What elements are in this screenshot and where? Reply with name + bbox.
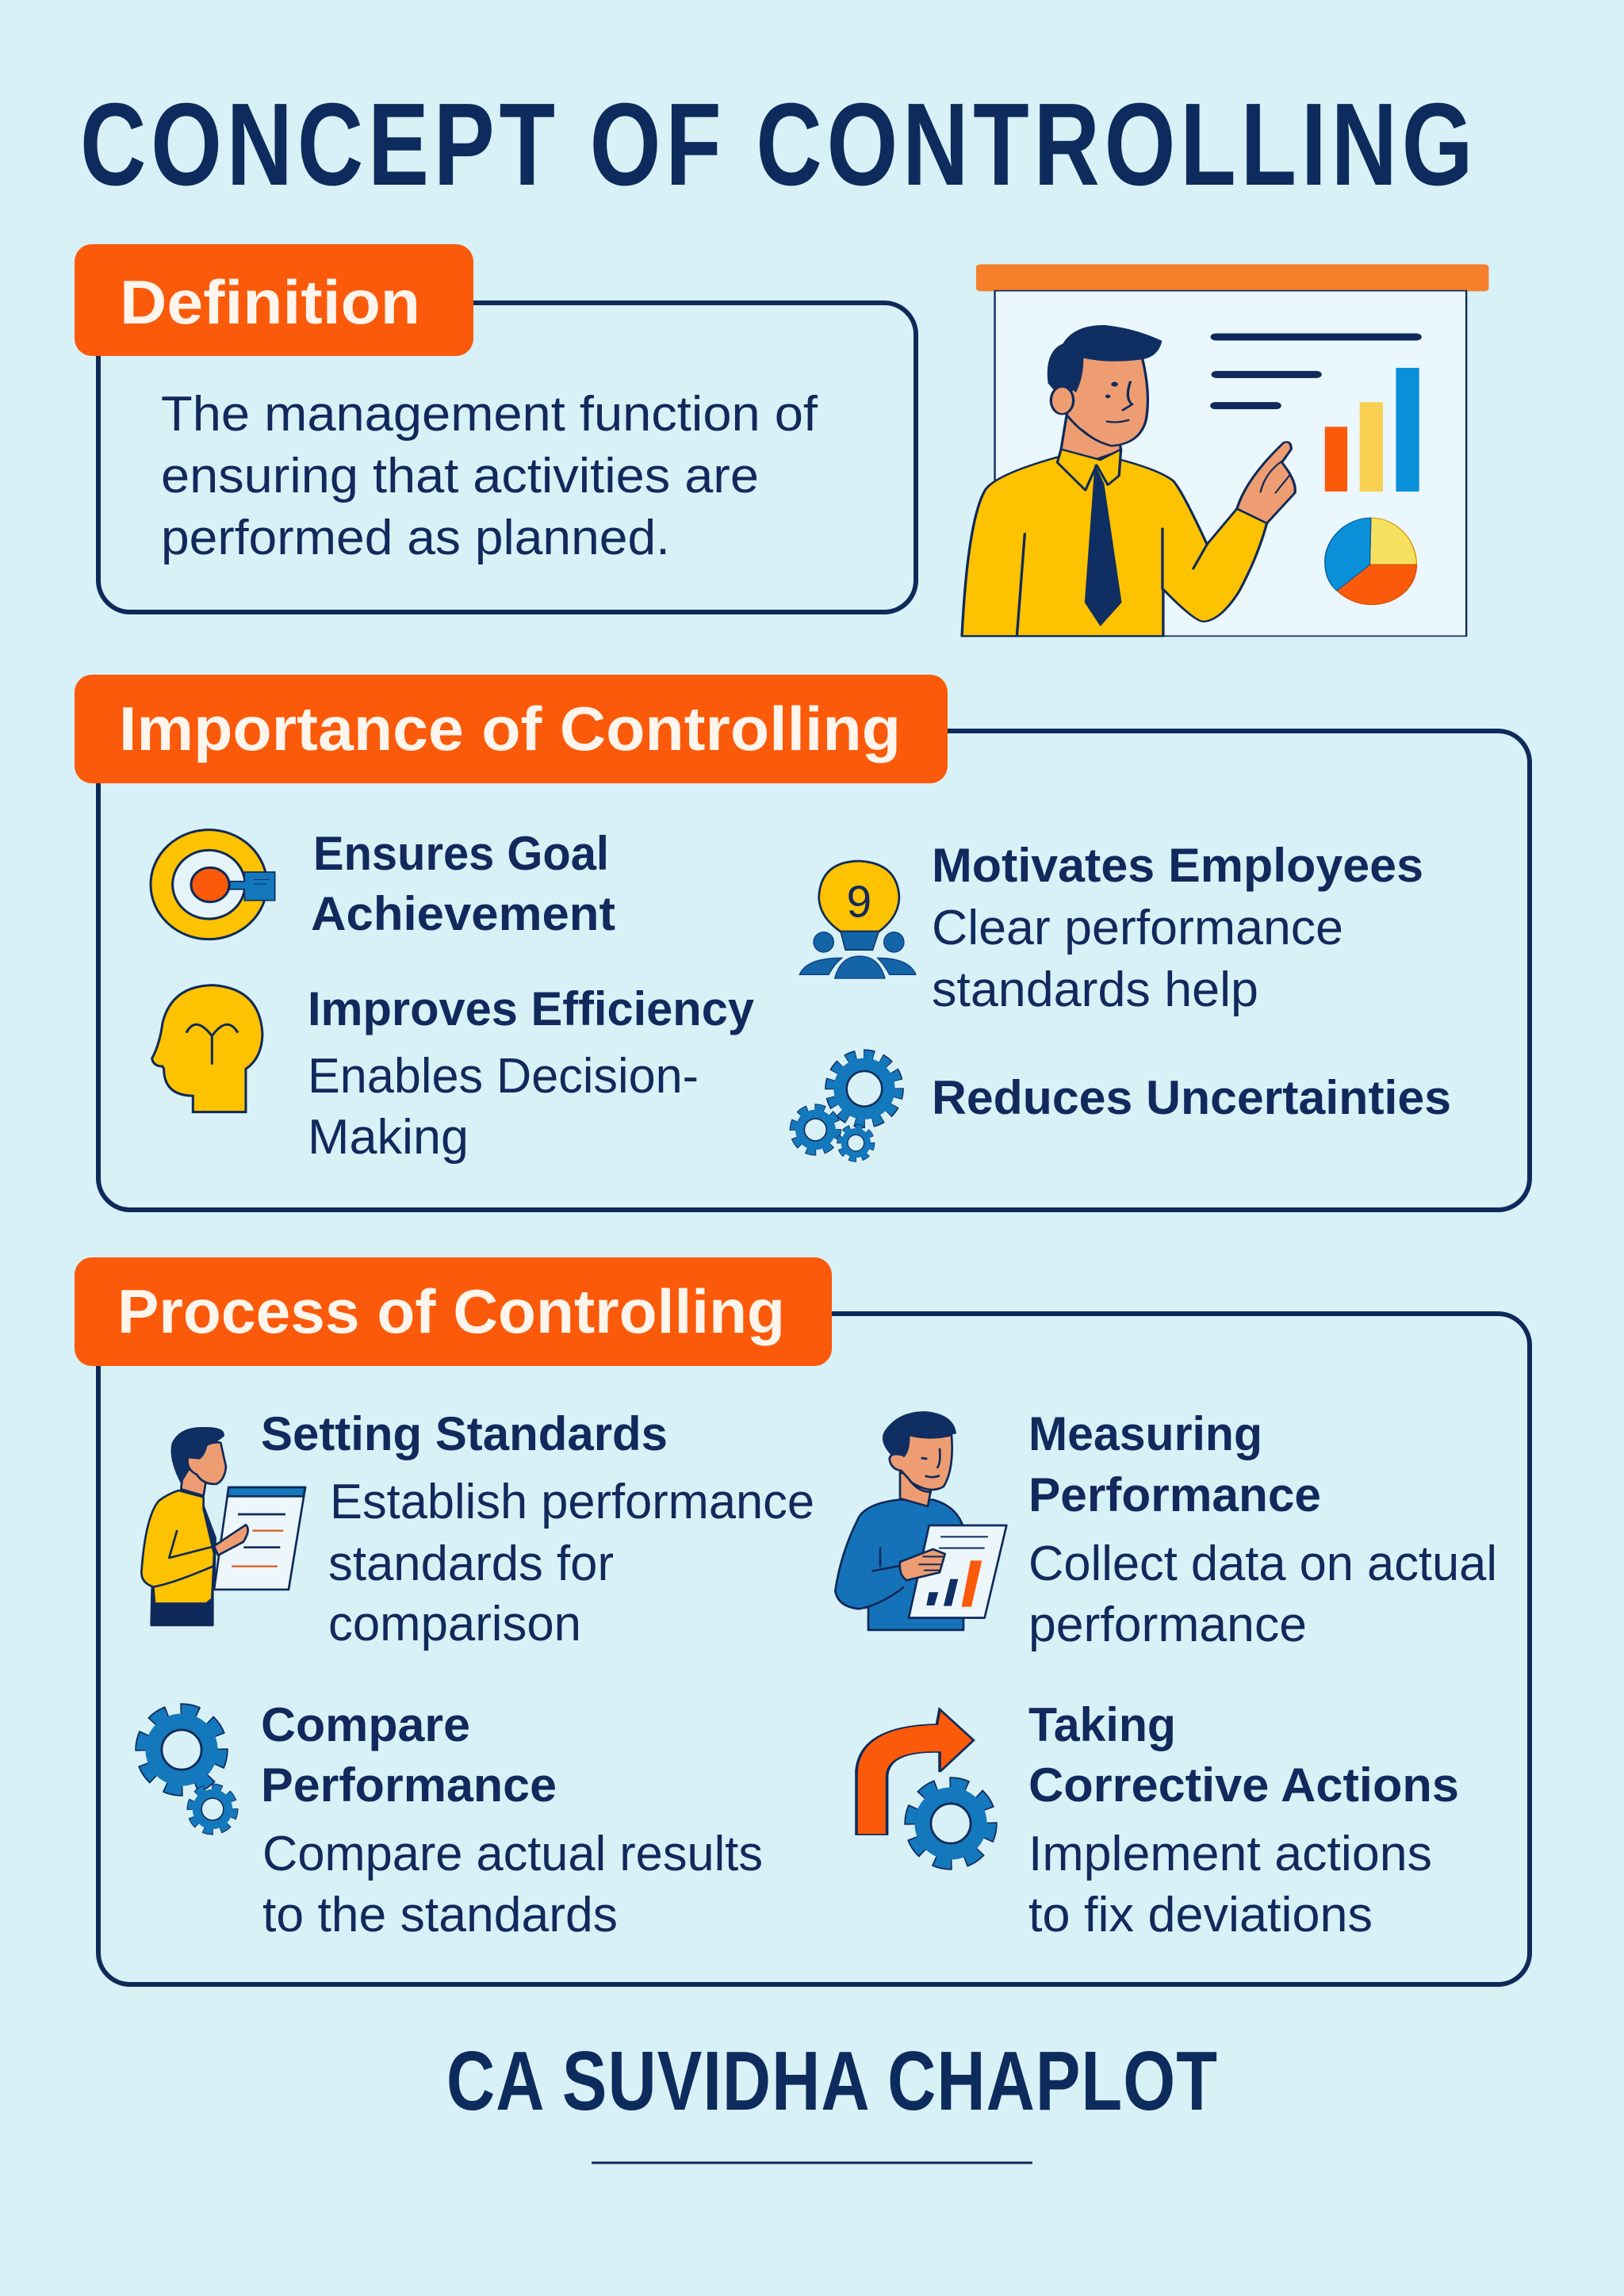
footer: author name: CA SUVIDHA CHAPLOT	[446, 2034, 1217, 2128]
item: setting standards	[261, 1407, 814, 1651]
icon: person with report	[835, 1411, 1006, 1630]
item: setting standards: Establish performance	[330, 1475, 814, 1529]
board roller	[976, 264, 1488, 291]
panel: importance of controlling	[75, 675, 1530, 1210]
item: motivates employees: Motivates Employees	[932, 839, 1423, 892]
item: improves efficiency: Enables Decision-	[308, 1049, 699, 1104]
bar chart	[1325, 368, 1419, 492]
icon: lightbulb with people: 9	[847, 878, 871, 928]
item: ensures goal achievement: Achievement	[311, 887, 615, 940]
item: motivates employees: Clear performance	[932, 901, 1343, 955]
board	[995, 291, 1466, 636]
illustration: presenter at chart board	[962, 264, 1488, 636]
process heading tab: Process of Controlling	[117, 1276, 785, 1346]
item: taking corrective actions	[1028, 1698, 1459, 1942]
importance heading tab	[75, 675, 948, 783]
pie chart	[1325, 518, 1416, 605]
item: motivates employees	[932, 839, 1423, 1017]
item: setting standards: standards for	[328, 1536, 614, 1591]
title: CONCEPT OF CONTROLLING	[80, 79, 1473, 210]
importance box	[98, 731, 1530, 1210]
definition text	[161, 387, 818, 565]
item: measuring performance: Performance	[1028, 1468, 1321, 1521]
item: measuring performance: performance	[1028, 1598, 1307, 1652]
board text lines	[1216, 337, 1416, 406]
definition text: The management function of	[161, 387, 818, 442]
definition heading tab	[75, 244, 473, 356]
icon: gears	[795, 1057, 897, 1158]
item: measuring performance: Measuring	[1028, 1407, 1262, 1460]
item: compare performance: Performance	[261, 1758, 557, 1812]
item: taking corrective actions: Corrective Actions	[1028, 1758, 1459, 1812]
icon: lightbulb with people	[799, 861, 916, 978]
item: compare performance	[261, 1698, 763, 1942]
definition box	[98, 303, 916, 612]
item: taking corrective actions: to fix deviations	[1028, 1888, 1373, 1942]
item: measuring performance	[1028, 1407, 1497, 1652]
definition heading tab: Definition	[120, 267, 420, 337]
item: motivates employees: standards help	[932, 962, 1258, 1017]
process box	[98, 1314, 1530, 1984]
item: setting standards: comparison	[328, 1597, 581, 1651]
item: ensures goal achievement: Ensures Goal	[313, 827, 609, 880]
item: reduces uncertainties: Reduces Uncertainties	[932, 1071, 1451, 1124]
process heading tab	[75, 1257, 832, 1366]
icon: head	[152, 985, 262, 1112]
item: setting standards: Setting Standards	[261, 1407, 668, 1460]
panel: process of controlling	[75, 1257, 1530, 1984]
item: taking corrective actions: Implement actions	[1028, 1827, 1432, 1881]
item: compare performance: Compare actual results	[262, 1827, 763, 1881]
panel: definition	[75, 244, 916, 612]
item: measuring performance: Collect data on actual	[1028, 1536, 1497, 1591]
importance heading tab: Importance of Controlling	[119, 694, 901, 763]
item: ensures goal achievement	[311, 827, 615, 940]
item: improves efficiency	[308, 982, 755, 1165]
definition text: performed as planned.	[161, 511, 670, 565]
item: compare performance: to the standards	[262, 1888, 618, 1942]
icon: person with checklist	[141, 1427, 305, 1625]
item: improves efficiency: Improves Efficiency	[308, 982, 755, 1035]
definition text: ensuring that activities are	[161, 449, 759, 503]
presenter	[962, 325, 1295, 636]
icon: compare gears	[144, 1712, 233, 1830]
icon: target	[151, 830, 275, 939]
icon: arrow with gear	[856, 1709, 989, 1862]
item: compare performance: Compare	[261, 1698, 470, 1751]
item: improves efficiency: Making	[308, 1110, 469, 1165]
item: taking corrective actions: Taking	[1028, 1698, 1176, 1751]
